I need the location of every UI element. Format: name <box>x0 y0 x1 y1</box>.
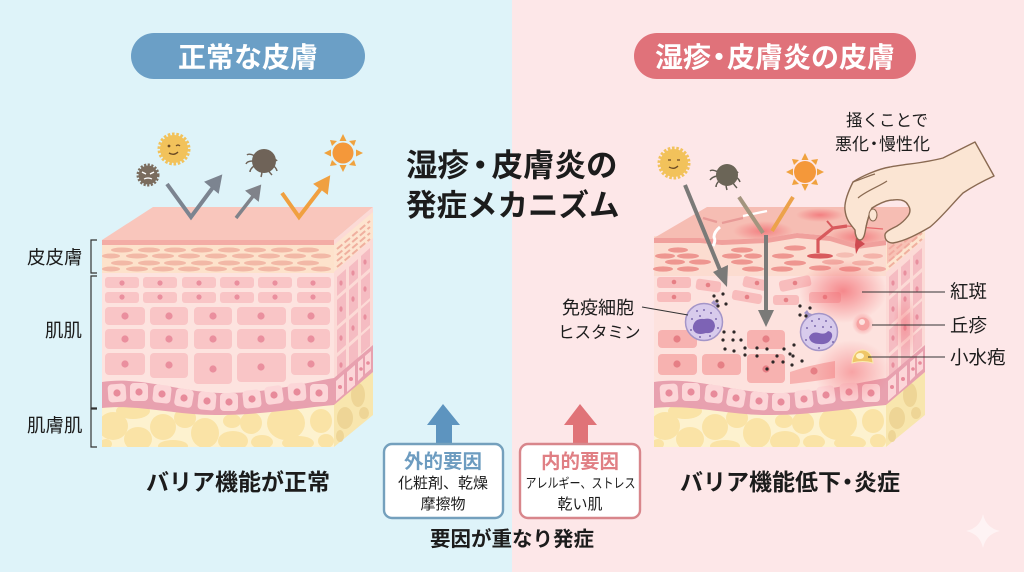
label: immune cells and histamine <box>558 298 688 342</box>
epidermis background <box>654 273 887 395</box>
arrow: mite penetrating <box>739 197 763 233</box>
label: immune cells and histamine: 免疫細胞 <box>562 298 634 318</box>
epidermis cells <box>102 273 334 395</box>
arrow: internal factor <box>564 404 597 444</box>
immune cell right <box>800 310 838 350</box>
center title <box>406 147 620 223</box>
box: external factors: 外的要因 <box>404 451 482 473</box>
arrow: vertical penetrating <box>758 235 774 327</box>
layer labels with brackets: 肌肌 <box>45 320 82 341</box>
arrow: external factor <box>427 404 460 444</box>
fat layer <box>98 372 373 452</box>
heading pill: normal skin: 正常な皮膚 <box>178 42 318 73</box>
caption: eczema: バリア機能低下・炎症 <box>680 469 900 495</box>
icon: pollen <box>660 149 688 177</box>
basal layer <box>102 378 334 415</box>
icon: smiling pollen <box>160 135 188 163</box>
label: scratching worsens: 掻くことで <box>846 111 928 130</box>
vesicle <box>852 350 873 363</box>
box: external factors <box>384 444 503 518</box>
label: erythema <box>862 281 987 302</box>
layer labels with brackets: 肌膚肌 <box>27 415 83 436</box>
icon: mite <box>710 164 740 190</box>
icon: orange sun <box>324 134 363 172</box>
arrow: UV repelled <box>282 177 329 217</box>
center title: 湿疹・皮膚炎の <box>406 147 618 183</box>
label: immune cells and histamine: ヒスタミン <box>558 323 640 342</box>
fat layer <box>650 372 925 452</box>
label: papule: 丘疹 <box>950 315 987 336</box>
label: scratching worsens <box>835 111 930 154</box>
epidermis cells <box>657 275 841 384</box>
panel: eczema skin block <box>650 207 925 452</box>
center title: 発症メカニズム <box>406 188 620 223</box>
top surface <box>102 207 373 240</box>
background: normal side <box>0 0 512 572</box>
hand scratching <box>845 142 994 243</box>
background: eczema side <box>512 0 1024 572</box>
arrow: UV penetrating <box>772 197 793 231</box>
lower inflammation glow <box>814 340 890 404</box>
box: internal factors: アレルギー、ストレス <box>526 476 636 491</box>
icon: sparkle <box>966 514 1000 548</box>
icon: orange sun <box>786 153 824 191</box>
heading pill: eczema skin <box>634 33 916 79</box>
box: external factors: 化粧剤、乾燥 <box>398 475 488 492</box>
label: vesicle <box>868 347 1006 368</box>
immune cell left <box>686 300 722 340</box>
arrow: mite repelled <box>236 186 260 218</box>
icon: mite <box>246 149 277 177</box>
stratum corneum layer <box>102 245 334 275</box>
stratum corneum layer damaged <box>653 236 887 276</box>
box: internal factors: 乾い肌 <box>557 496 603 513</box>
caption: overlapping factors: 要因が重なり発症 <box>430 527 594 551</box>
erythema glow <box>799 259 887 323</box>
layer labels with brackets: 皮皮膚 <box>27 247 83 268</box>
side face <box>334 207 373 405</box>
label: vesicle: 小水疱 <box>950 347 1006 368</box>
icon: germ <box>138 166 158 184</box>
top surface with redness <box>654 207 925 249</box>
heading pill: eczema skin: 湿疹・皮膚炎の皮膚 <box>655 42 895 73</box>
papule <box>852 313 874 335</box>
label: scratching worsens: 悪化・慢性化 <box>835 134 930 154</box>
box: internal factors <box>520 444 640 518</box>
box: external factors: 摩擦物 <box>420 496 466 513</box>
arrow: pollen penetrating <box>685 185 728 287</box>
heading pill: normal skin <box>131 33 365 79</box>
label: erythema: 紅斑 <box>950 281 987 302</box>
skin cracks <box>703 211 883 259</box>
label: papule <box>872 315 987 336</box>
histamine dots <box>712 292 812 371</box>
side face <box>886 207 925 405</box>
box: internal factors: 内的要因 <box>541 451 619 473</box>
panel: normal skin block <box>98 207 373 452</box>
side inflammation glow <box>893 293 917 357</box>
arrow: pollen repelled <box>167 176 221 217</box>
caption: normal: バリア機能が正常 <box>146 469 330 495</box>
basal layer <box>654 378 886 415</box>
layer labels with brackets <box>27 240 97 447</box>
